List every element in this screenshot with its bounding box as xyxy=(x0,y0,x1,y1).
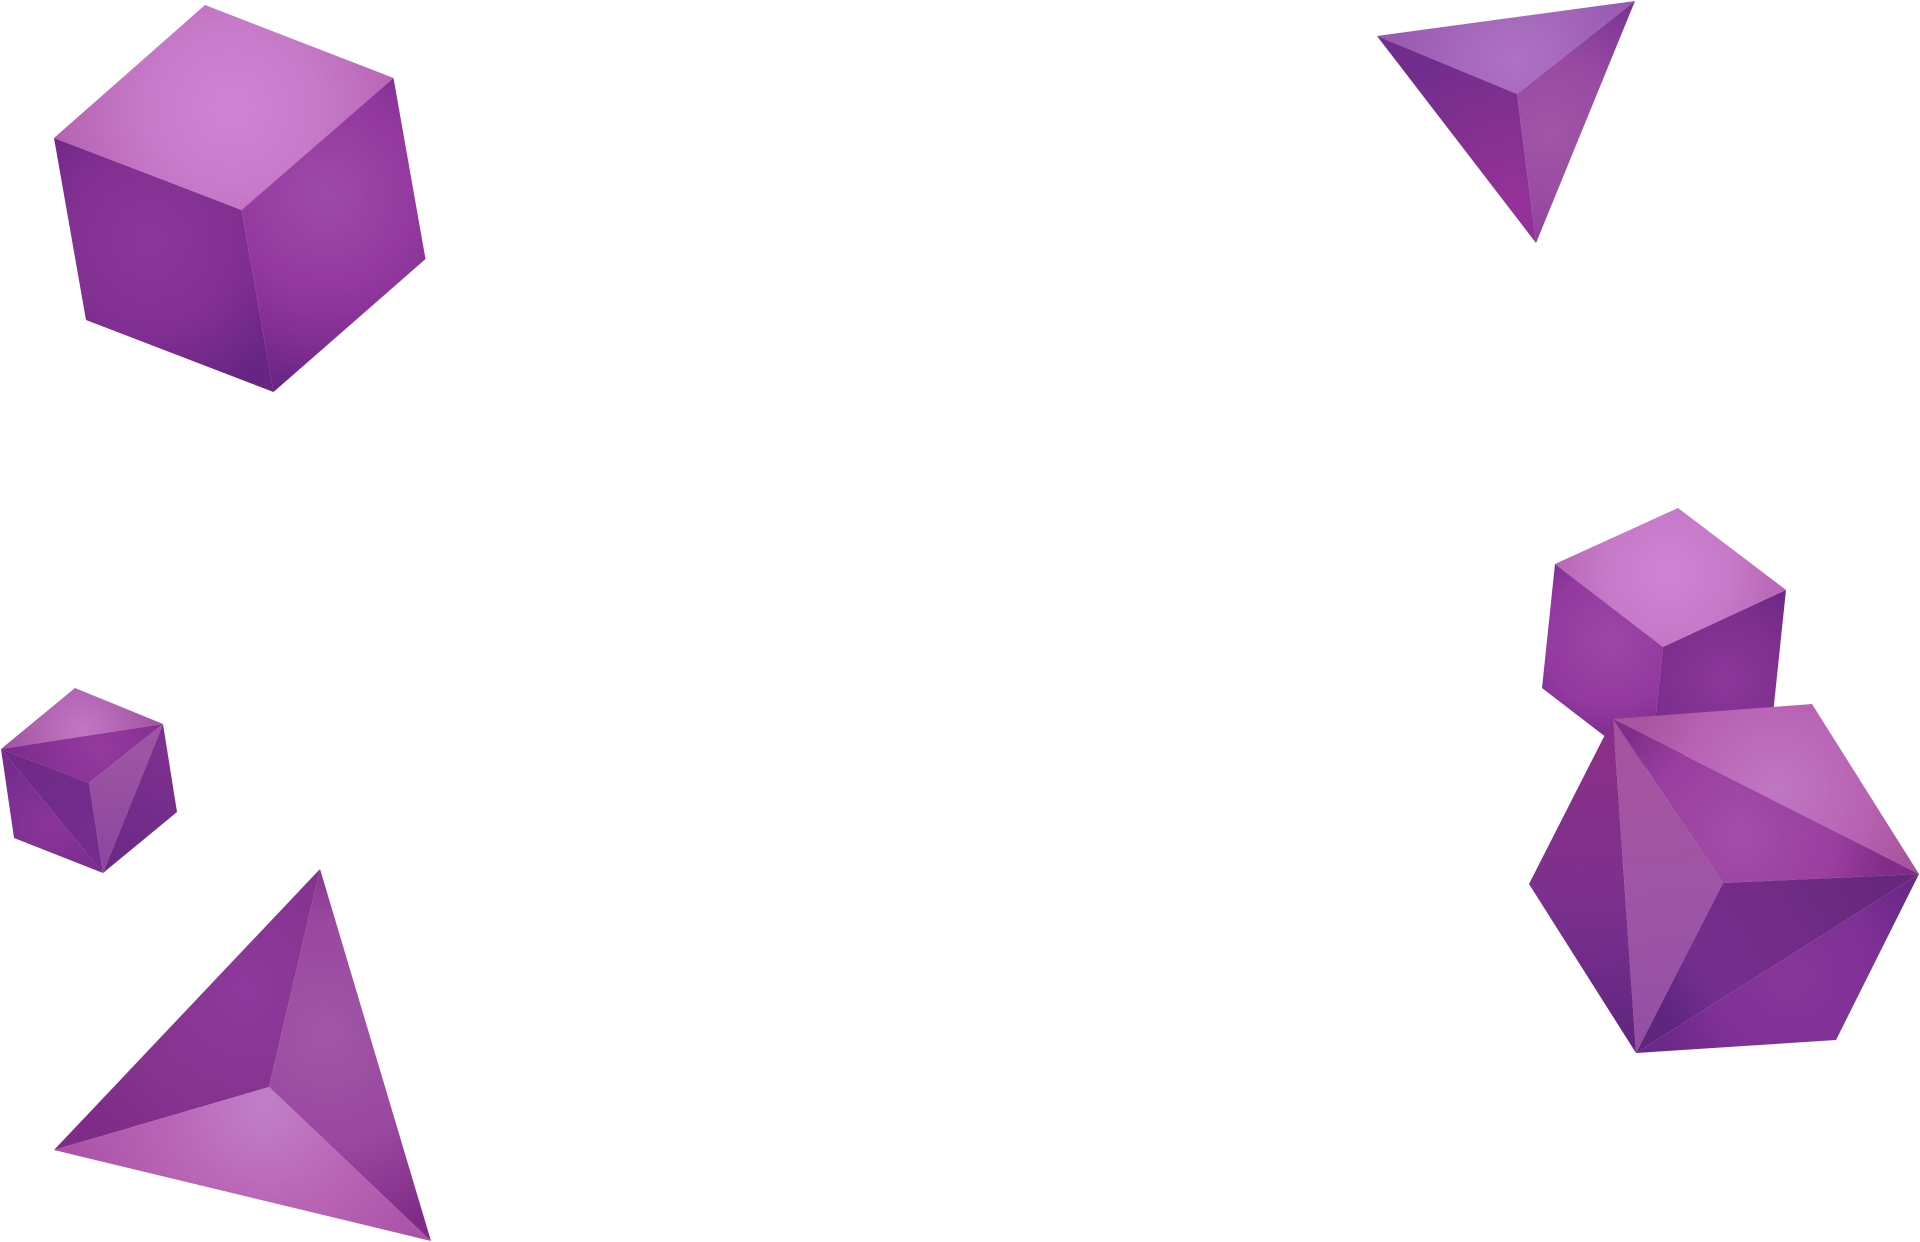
shape: large faceted cube bottom-right xyxy=(1529,704,1919,1053)
shape: small faceted cube left xyxy=(1,688,177,873)
shape: cube right, behind faceted shape xyxy=(1542,508,1786,771)
shape: large tetrahedron bottom-left xyxy=(54,869,431,1241)
shape: large cube top-left xyxy=(54,5,426,392)
shape: tetrahedron top-right xyxy=(1377,1,1635,243)
